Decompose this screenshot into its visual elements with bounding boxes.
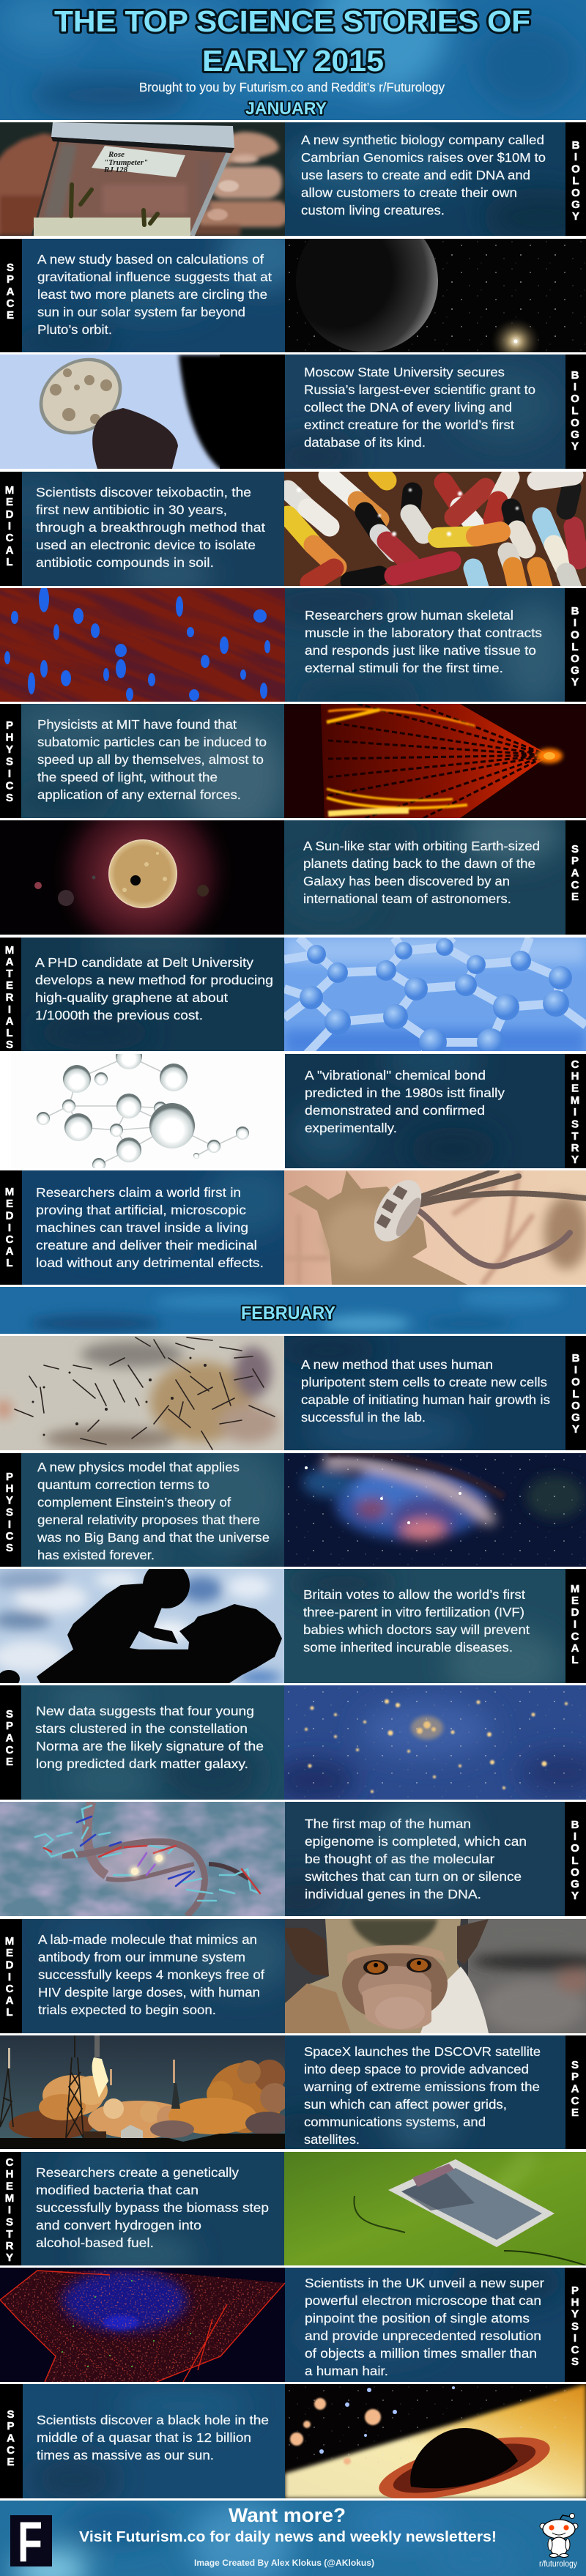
story text: be thought of as the molecular [305,1852,494,1866]
story text: pinpoint the position of single atoms [305,2311,530,2326]
category tab: MEDICAL [5,484,14,568]
text panel [285,2260,565,2382]
story text: sun in our solar system far beyond [37,305,245,319]
photo: petri dish [0,355,285,469]
text panel [263,1794,565,1919]
photo: rose in jar [0,122,285,236]
category tab: BIOLOGY [571,139,580,223]
story text: collect the DNA of every living and [304,400,512,415]
text panel [21,2152,284,2276]
story text: Scientists in the UK unveil a new super [305,2276,544,2290]
story text: epigenome is completed, which can [305,1834,527,1849]
chart image: particle acceleration [284,704,586,818]
heading: January: JANUARY [245,99,327,119]
story text [37,1460,270,1562]
story 16: medical [0,1916,586,2033]
february band [0,1287,586,1334]
story text: A new synthetic biology company called [301,133,544,147]
subreddit label: r/futurology [539,2558,577,2569]
text panel [21,1453,284,1567]
story text: HIV despite large doses, with human [38,1985,260,2000]
story text [304,365,535,450]
credit line: Image Created By Alex Klokus (@AKlokus) [194,2558,374,2568]
text panel [285,355,565,469]
heading: February: FEBRUARY [241,1303,335,1324]
text panel [22,1170,284,1285]
category tab [565,1336,586,1450]
story text [35,955,273,1022]
footer call to action: Visit Futurism.co for daily news and weekly newsletters! [79,2529,497,2545]
story text [305,1816,527,1901]
story text: satellites. [304,2132,360,2147]
category tab [0,938,21,1051]
photo: SpaceX launch [0,2035,289,2149]
text panel [284,1336,565,1450]
story text: database of its kind. [304,435,426,450]
story text [303,2044,541,2147]
story text: use lasers to create and edit DNA and [301,168,530,182]
story text: experimentally. [305,1121,397,1135]
story text: allow customers to create their own [301,185,517,200]
category tab: BIOLOGY [571,1352,580,1436]
header background [0,0,586,120]
category tab: PHYSICS [6,1471,14,1554]
text panel [21,938,284,1051]
story text: and responds just like native tissue to [305,643,536,658]
story text [301,133,546,218]
photo: rose in jar: Rose [108,150,125,159]
story text: babies which doctors say will prevent [303,1622,530,1637]
story 4: medical [0,472,586,596]
category tab: SPACE [571,2059,579,2119]
photo: graphene lattice [284,938,586,1051]
story text: complement Einstein’s theory of [37,1495,231,1510]
category tab [565,2268,586,2382]
logo: Futurism F: F [18,2509,42,2574]
category tab [565,1569,586,1683]
title: EARLY 2015 [202,44,384,78]
story text: Cambrian Genomics raises over $10M to [301,150,546,165]
story 7: space [0,779,586,969]
story text: A lab-made molecule that mimics an [38,1932,257,1947]
story text: A Sun-like star with orbiting Earth-sized [303,839,540,853]
story text: demonstrated and confirmed [305,1103,485,1118]
category tab [565,355,586,469]
story text: successful in the lab. [301,1410,426,1425]
category tab [0,1919,22,2033]
story 6: physics [0,704,586,836]
text panel [285,122,565,236]
story 11: biology [0,1333,586,1453]
category tab [0,2384,23,2498]
story 14: space [0,1678,586,1810]
story text: used an electronic device to isolate [36,538,256,552]
footer heading: Want more? [229,2504,346,2526]
story text: three-parent in vitro fertilization (IVF) [303,1605,524,1619]
text panel [284,1569,565,1683]
story 9: chemistry [0,1043,586,1171]
story text: and provide unprecedented resolution [305,2328,541,2343]
story 5: biology [0,360,586,930]
story text [37,2413,269,2462]
photo: monkey [285,1916,586,2033]
category tab: PHYSICS [6,719,14,804]
category tab: BIOLOGY [571,1819,579,1902]
story 8: materials [0,930,586,1056]
story 18: chemistry [0,2152,586,2276]
story text: communications systems, and [304,2115,486,2129]
story 12: physics [0,1446,586,1585]
photo: pills [284,472,586,586]
story text: international team of astronomers. [303,891,511,906]
category tab: BIOLOGY [571,369,579,453]
story text: individual genes in the DNA. [305,1887,481,1901]
story text: into deep space to provide advanced [304,2062,529,2076]
story text: capable of initiating human hair growth is [301,1392,550,1407]
category tab: PHYSICS [571,2284,579,2368]
story text: external stimuli for the first time. [305,661,503,675]
story text: switches that can turn on or silence [305,1869,522,1884]
story text: Norma are the likely signature of the [36,1739,264,1753]
story text: Britain votes to allow the world’s first [303,1587,525,1602]
text panel [285,1054,565,1168]
story text: Scientists discover a black hole in the [37,2413,269,2427]
story text: pluripotent stem cells to create new cells [301,1375,547,1389]
category tab: SPACE [6,1708,14,1768]
story text: stars clustered in the constellation [35,1721,248,1736]
photo: rose in jar: RJ 128 [103,166,128,174]
category tab: MEDICAL [5,1935,14,2019]
story text [303,839,540,906]
story text [37,717,267,802]
story text: A PHD candidate at Delt University [35,955,253,970]
story text [301,1357,550,1425]
story text: subatomic particles can be induced to [37,735,267,749]
category tab [565,1802,586,1916]
story text: trials expected to begin soon. [38,2002,216,2017]
text panel [284,820,565,935]
story text: Researchers create a genetically [36,2165,239,2180]
story 3: biology [0,342,586,479]
story text: SpaceX launches the DSCOVR satellite [304,2044,541,2059]
story text: Pluto’s orbit. [37,322,112,337]
photo: star cluster [270,1685,586,1803]
story text: Russia’s largest-ever scientific grant to [304,382,535,397]
category tab [0,1453,21,1567]
story text: the speed of light, without the [37,770,218,784]
story text: some inherited incurable diseases. [303,1640,513,1655]
story text: sun which can affect power grids, [304,2097,507,2112]
story text: alcohol-based fuel. [36,2235,154,2250]
category tab [565,122,586,236]
story text: custom living creatures. [301,203,445,218]
title [54,4,530,78]
photo: artificial leaf [284,2152,586,2265]
story 20: space [0,2384,586,2512]
story text: general relativity proposes that there [37,1512,260,1527]
story text: The first map of the human [305,1816,471,1831]
category tab [0,704,21,818]
story text: first new antibiotic in 30 years, [36,502,227,517]
story text [303,1587,530,1655]
category tab [0,239,22,352]
story text: long predicted dark matter galaxy. [36,1756,248,1771]
text panel [270,2035,565,2153]
story text: A new study based on calculations of [37,252,264,267]
story text: middle of a quasar that is 12 billion [37,2430,251,2445]
category tab [0,472,22,586]
text panel [22,472,284,586]
story text: of objects a million times smaller than [305,2346,537,2361]
story text: application of any external forces. [37,787,241,802]
story text: through a breakthrough method that [36,520,265,535]
story text: Scientists discover teixobactin, the [36,485,251,500]
story text: antibiotic compounds in soil. [36,555,214,570]
illustration: nanomachine on cell [284,1170,586,1285]
logo: Reddit alien [540,2514,578,2558]
subtitle: Brought to you by Futurism.co and Reddit’s r/Futurology [139,80,445,94]
photo: rose in jar: "Trumpeter" [104,158,148,167]
story text: creature and deliver their medicinal [36,1238,257,1252]
footer background [0,2501,586,2576]
story text [305,2276,544,2378]
story text: has existed forever. [37,1548,155,1562]
category tab: MEDICAL [5,1186,14,1269]
text panel [285,588,565,702]
photo: parent and baby silhouette [0,1569,284,1683]
story text: antibody from our immune system [38,1950,245,1964]
photo: hair growth on skin [0,1336,284,1450]
illustration: molecule droplets [37,1054,249,1168]
category tab [0,1685,21,1800]
story text [36,1185,264,1270]
story text: speed up all by themselves, almost to [37,752,264,767]
story 1: biology [0,122,586,247]
story text: proving that artificial, microscopic [36,1203,246,1217]
story 17: space [0,2035,586,2153]
category tab: SPACE [7,2408,15,2468]
story text: 1/1000th the previous cost. [35,1008,203,1022]
title: THE TOP SCIENCE STORIES OF [54,4,530,38]
photo: muscle tissue [0,588,285,702]
story text [305,1068,505,1135]
story 19: physics [0,2260,586,2382]
story 2: space [0,210,586,365]
story text: New data suggests that four young [36,1704,254,1718]
story 10: medical [0,1163,586,1285]
photo: distant planet [285,239,586,352]
story text: A "vibrational" chemical bond [305,1068,486,1083]
category tab [565,1054,586,1168]
photo: sun-like star [0,820,284,935]
story text [38,1932,264,2017]
category tab: SPACE [7,261,15,322]
story text: muscle in the laboratory that contracts [305,626,542,640]
story text: times as massive as our sun. [37,2448,214,2462]
story text: modified bacteria that can [36,2183,199,2197]
story text: extinct creature for the world’s first [304,417,514,432]
category tab: MATERIALS [5,944,14,1051]
photo: electron microscope cell [0,2268,285,2382]
category tab [0,1170,22,1285]
story text [305,608,542,675]
category tab [565,820,586,935]
story text: Researchers claim a world first in [36,1185,241,1200]
illustration: black hole [285,2384,586,2512]
category tab [565,588,586,702]
story text: was no Big Bang and that the universe [37,1530,270,1545]
story text: Galaxy has been discovered by an [303,874,510,888]
category tab [0,2152,21,2265]
text panel [23,2384,285,2509]
text panel [22,1916,293,2033]
story text: gravitational influence suggests that at [37,270,272,284]
story text: least two more planets are circling the [37,287,267,302]
category tab: SPACE [571,843,579,903]
story text: A new method that uses human [301,1357,493,1372]
photo: nebula [284,1453,586,1567]
story text: successfully keeps 4 monkeys free of [38,1967,264,1982]
story text: machines can travel inside a living [36,1220,248,1235]
story text: successfully bypass the biomass step [36,2200,269,2215]
text panel [21,704,284,818]
story text: warning of extreme emissions from the [303,2079,540,2094]
story text: a human hair. [305,2364,388,2378]
story text: develops a new method for producing [35,973,273,987]
story text [36,2165,269,2250]
story text: quantum correction terms to [37,1477,209,1492]
story text: Researchers grow human skeletal [305,608,513,623]
story text: predicted in the 1980s istt finally [305,1085,505,1100]
story text [35,1704,264,1771]
category tab: CHEMISTRY [571,1058,579,1166]
category tab: CHEMISTRY [5,2156,14,2264]
category tab: MEDICAL [571,1583,579,1666]
story text: Moscow State University secures [304,365,505,379]
story text: A new physics model that applies [37,1460,240,1474]
story text [37,252,272,337]
story 15: biology [0,1794,586,1919]
category tab [565,2035,586,2149]
story text: high-quality graphene at about [35,990,228,1005]
story text: and convert hydrogen into [36,2218,201,2232]
text panel [22,239,285,352]
story text: Physicists at MIT have found that [37,717,237,732]
story text: load without any detrimental effects. [36,1255,264,1270]
category tab: BIOLOGY [571,605,579,688]
illustration: DNA helix [0,1802,285,1916]
story text: powerful electron microscope that can [305,2293,541,2308]
story 13: medical [0,1562,586,1701]
story text [36,485,265,570]
text panel [21,1678,284,1810]
story text: planets dating back to the dawn of the [303,856,535,871]
